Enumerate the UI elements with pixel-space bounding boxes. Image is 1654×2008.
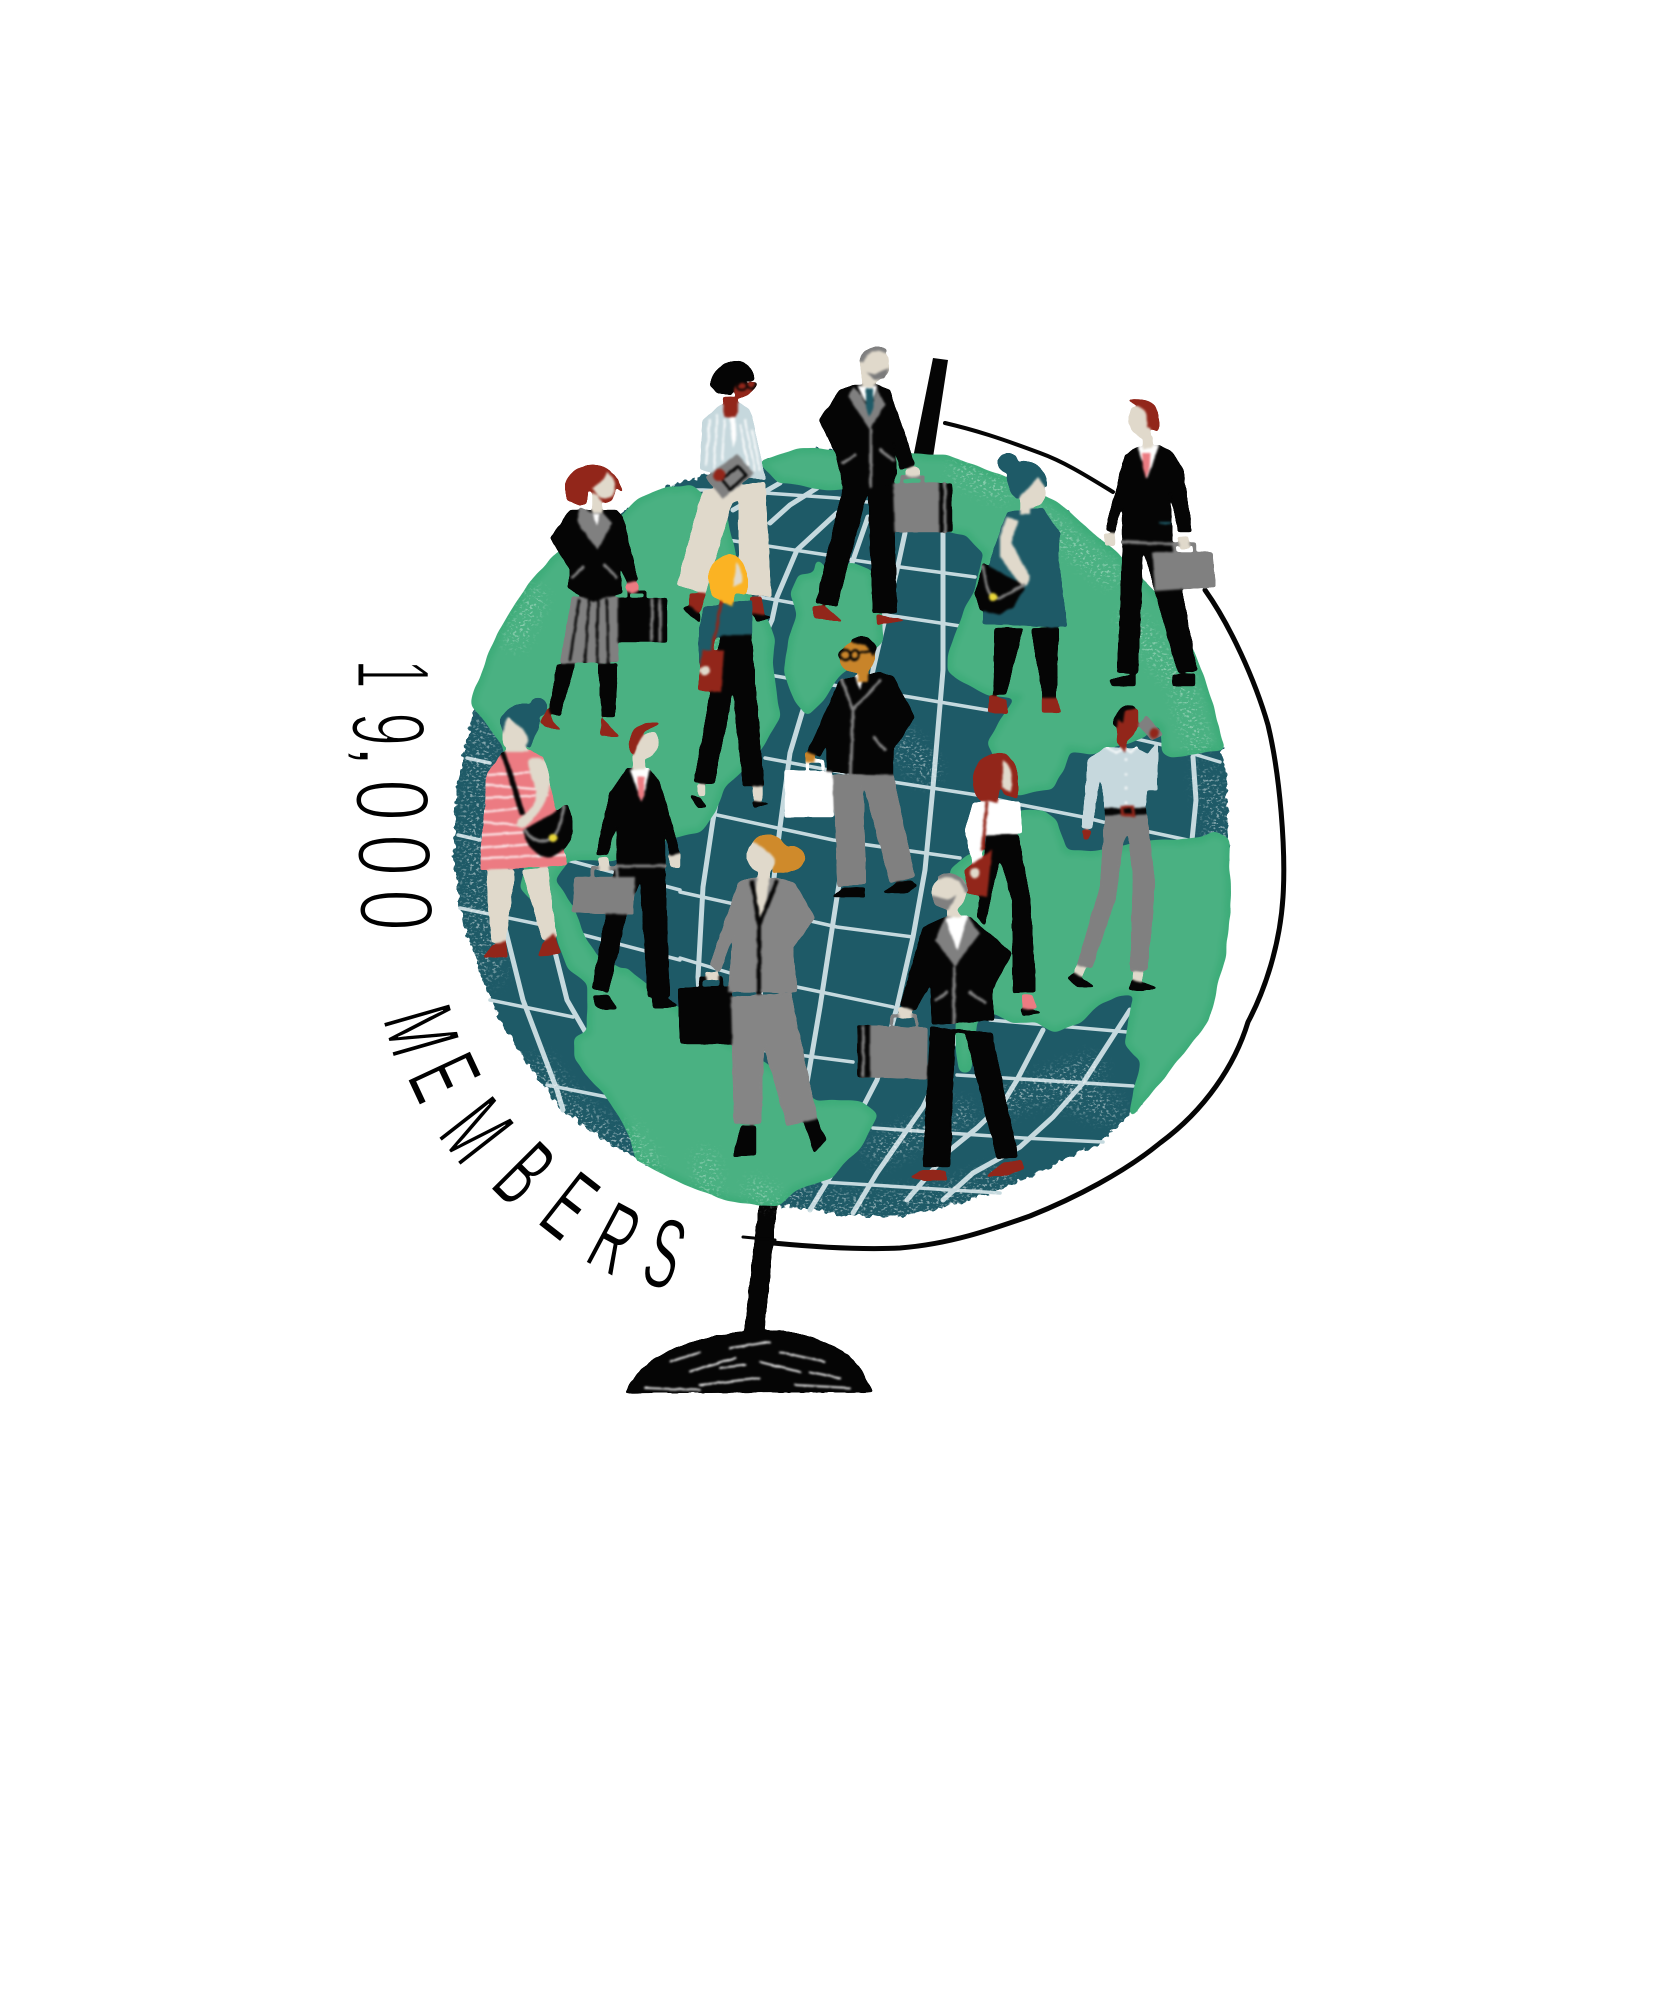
globe meridian arm (743, 358, 1284, 1249)
caption: 19,000 MEMBERS: 0 (337, 889, 454, 931)
globe stand base (625, 1204, 873, 1393)
person: woman with pink striped dress and black bag (480, 698, 572, 957)
person: blonde woman with teal top and red bag (690, 555, 772, 808)
person: bearded man in black suit with grey briefcase, bottom (857, 875, 1024, 1181)
person: woman with long red hair, white top and red bag (965, 753, 1043, 1016)
ocean chalk texture (473, 720, 1219, 1206)
caption: 19,000 MEMBERS: S (632, 1195, 698, 1312)
continent: north-west landmass (474, 487, 875, 1204)
person: man with red hair and black suit, top right (1103, 399, 1215, 686)
caption: 19,000 MEMBERS: , (339, 743, 439, 769)
caption: 19,000 MEMBERS: M (419, 1079, 534, 1182)
globe grid lines (458, 483, 1220, 1213)
caption: 19,000 MEMBERS: 9 (329, 712, 446, 746)
person: man with glasses, black coat, white bag (785, 637, 917, 897)
globe ocean (453, 450, 1228, 1217)
continent: centre landmass (787, 563, 880, 712)
person: woman with glasses, striped jacket and cream trousers (677, 362, 772, 623)
land chalk texture (515, 472, 1198, 1198)
person: woman with red bob and pleated skirt (540, 465, 667, 737)
caption: 19,000 MEMBERS: B (473, 1122, 576, 1225)
continent: south-east landmass (950, 813, 1228, 1113)
person: man on phone with light blue shirt (1067, 705, 1163, 991)
caption: 19,000 MEMBERS: 0 (335, 834, 452, 876)
person: man with red hair, black suit and grey briefcase, left (572, 723, 680, 1010)
caption: 19,000 MEMBERS: E (387, 1038, 503, 1116)
caption: 19,000 MEMBERS: M (362, 994, 481, 1066)
caption: 19,000 MEMBERS (329, 659, 698, 1312)
continent: north-east landmass (763, 451, 1222, 792)
caption: 19,000 MEMBERS: 1 (334, 659, 452, 689)
caption: 19,000 MEMBERS: R (573, 1180, 657, 1296)
person: woman in grey suit with black briefcase (678, 835, 826, 1157)
person: woman with teal bun and black bag (975, 453, 1067, 714)
person: bald man with beard and grey briefcase (812, 349, 952, 625)
caption: 19,000 MEMBERS: 0 (333, 779, 450, 821)
continents (474, 451, 1228, 1204)
caption: 19,000 MEMBERS: E (522, 1151, 618, 1260)
